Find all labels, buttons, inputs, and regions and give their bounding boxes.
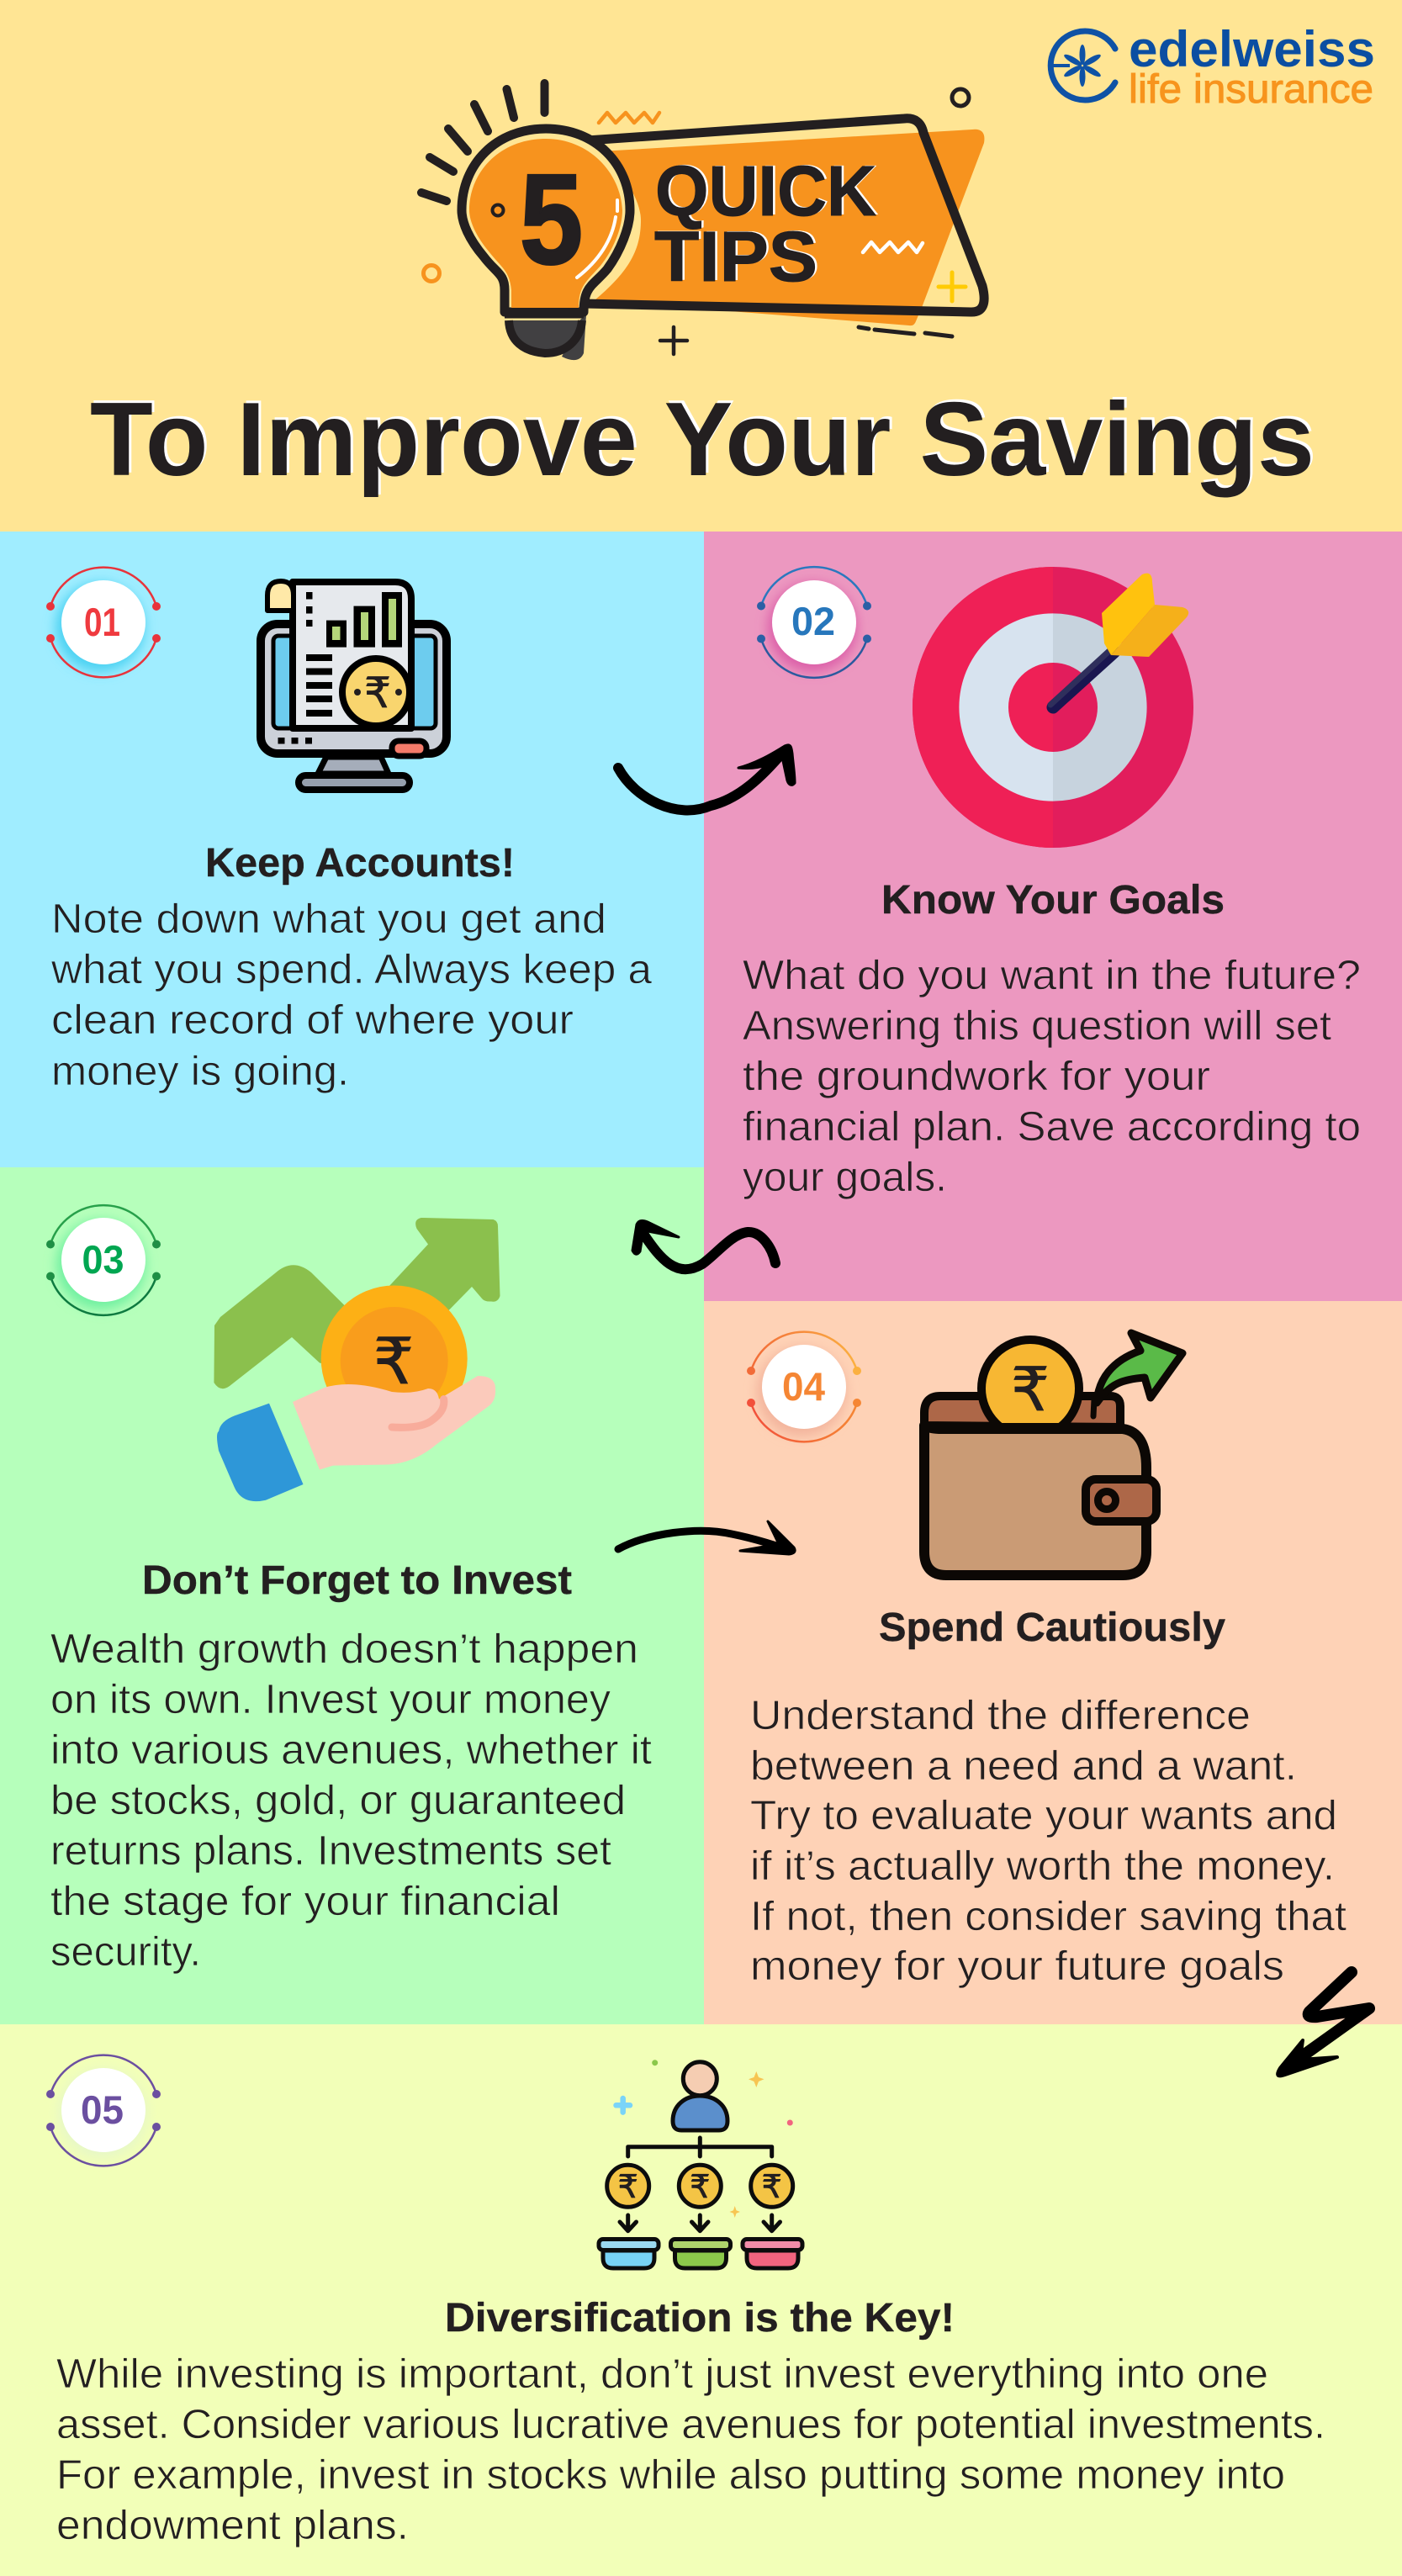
badge 05 — [46, 2055, 161, 2166]
body text: Try to evaluate your wants and — [750, 1793, 1337, 1838]
title: To Improve Your Savings — [90, 382, 1315, 498]
icon: person splitting money into three pots — [599, 2060, 802, 2268]
body text: Answering this question will set — [743, 1003, 1331, 1049]
badge 04: 04 — [782, 1364, 825, 1409]
icon: person splitting money into three pots: ₹ — [762, 2168, 782, 2205]
panel: 03 don't forget to invest — [0, 1167, 704, 2025]
body text: the groundwork for your — [743, 1054, 1210, 1099]
hero: 5 quick tips light bulb banner: 5 — [520, 148, 583, 291]
badge 03: 03 — [82, 1237, 124, 1282]
heading: Diversification is the Key!: Diversification is the Key! — [445, 2296, 955, 2341]
body text: Understand the difference — [750, 1693, 1251, 1738]
body text: financial plan. Save according to — [743, 1104, 1361, 1150]
panel: 04 spend cautiously — [704, 1301, 1402, 2025]
icon: monitor with ledger: ₹ — [364, 669, 391, 717]
body text: into various avenues, whether it — [50, 1727, 652, 1773]
badge 01: 01 — [84, 600, 120, 644]
body text: Note down what you get and — [51, 897, 606, 942]
icon: monitor with ledger — [261, 581, 447, 790]
arrow: 01 to 02 — [618, 745, 795, 810]
logo: edelweiss life insurance: life insurance — [1129, 67, 1373, 112]
body text: money for your future goals — [750, 1944, 1284, 1989]
body text: While investing is important, don’t just invest everything into one — [56, 2351, 1268, 2397]
heading: Spend Cautiously: Spend Cautiously — [879, 1605, 1225, 1650]
body text — [56, 2351, 1325, 2548]
title: To Improve Your Savings — [93, 379, 1317, 495]
panel: 02 know your goals — [704, 532, 1402, 1301]
body text: your goals. — [743, 1155, 947, 1200]
logo: edelweiss life insurance — [1048, 21, 1375, 112]
body text: the stage for your financial — [50, 1879, 560, 1924]
body text: returns plans. Investments set — [50, 1828, 611, 1874]
arrow: 02 to 03 — [632, 1221, 775, 1269]
badge 02 — [757, 567, 871, 678]
body text — [50, 1627, 652, 1975]
body text: clean record of where your — [51, 997, 574, 1043]
hero: 5 quick tips light bulb banner: TIPS — [657, 216, 820, 295]
icon: wallet with coin and arrow — [924, 1333, 1182, 1575]
body text — [750, 1693, 1346, 1989]
hero: 5 quick tips light bulb banner: TIPS — [654, 217, 817, 296]
body text: endowment plans. — [56, 2503, 409, 2548]
badge 03 — [46, 1205, 161, 1315]
body text — [743, 953, 1361, 1200]
icon: hand holding coin with growth arrow — [214, 1218, 500, 1501]
body text: If not, then consider saving that — [750, 1894, 1346, 1939]
heading: Keep Accounts!: Keep Accounts! — [205, 841, 515, 886]
badge 04 — [747, 1332, 861, 1441]
icon: person splitting money into three pots: ₹ — [690, 2168, 710, 2205]
body text: what you spend. Always keep a — [50, 947, 653, 992]
heading: Know Your Goals: Know Your Goals — [881, 878, 1225, 923]
hero: 5 quick tips light bulb banner: QUICK — [658, 151, 879, 230]
body text: asset. Consider various lucrative avenues for potential investments. — [56, 2402, 1325, 2447]
hero: 5 quick tips light bulb banner — [421, 83, 984, 360]
body text — [50, 897, 653, 1094]
body text: security. — [50, 1929, 201, 1975]
body text: What do you want in the future? — [743, 953, 1361, 998]
logo: edelweiss life insurance: edelweiss — [1129, 21, 1375, 77]
badge 05: 05 — [81, 2087, 124, 2132]
badge 01 — [46, 568, 161, 677]
panel: 05 diversification is the key — [0, 2024, 1402, 2576]
body text: between a need and a want. — [750, 1743, 1297, 1789]
hero: 5 quick tips light bulb banner: QUICK — [655, 151, 876, 230]
icon: hand holding coin with growth arrow: ₹ — [373, 1324, 414, 1399]
body text: if it’s actually worth the money. — [750, 1843, 1335, 1889]
icon: wallet with coin and arrow: ₹ — [1011, 1354, 1050, 1425]
panel: 01 keep accounts — [0, 532, 704, 1167]
heading: Don't Forget to Invest: Don’t Forget to Invest — [142, 1558, 572, 1603]
icon: dartboard — [913, 567, 1193, 848]
body text: Wealth growth doesn’t happen — [50, 1627, 638, 1672]
body text: For example, invest in stocks while also putting some money into — [56, 2452, 1285, 2498]
badge 02: 02 — [791, 599, 835, 643]
body text: on its own. Invest your money — [50, 1677, 611, 1722]
panel: header — [0, 0, 1402, 532]
body text: be stocks, gold, or guaranteed — [50, 1778, 626, 1823]
arrow: 04 to 05 — [1278, 1972, 1369, 2076]
body text: money is going. — [51, 1049, 349, 1094]
icon: person splitting money into three pots: ₹ — [618, 2168, 638, 2205]
arrow: 03 to 04 — [618, 1521, 795, 1554]
